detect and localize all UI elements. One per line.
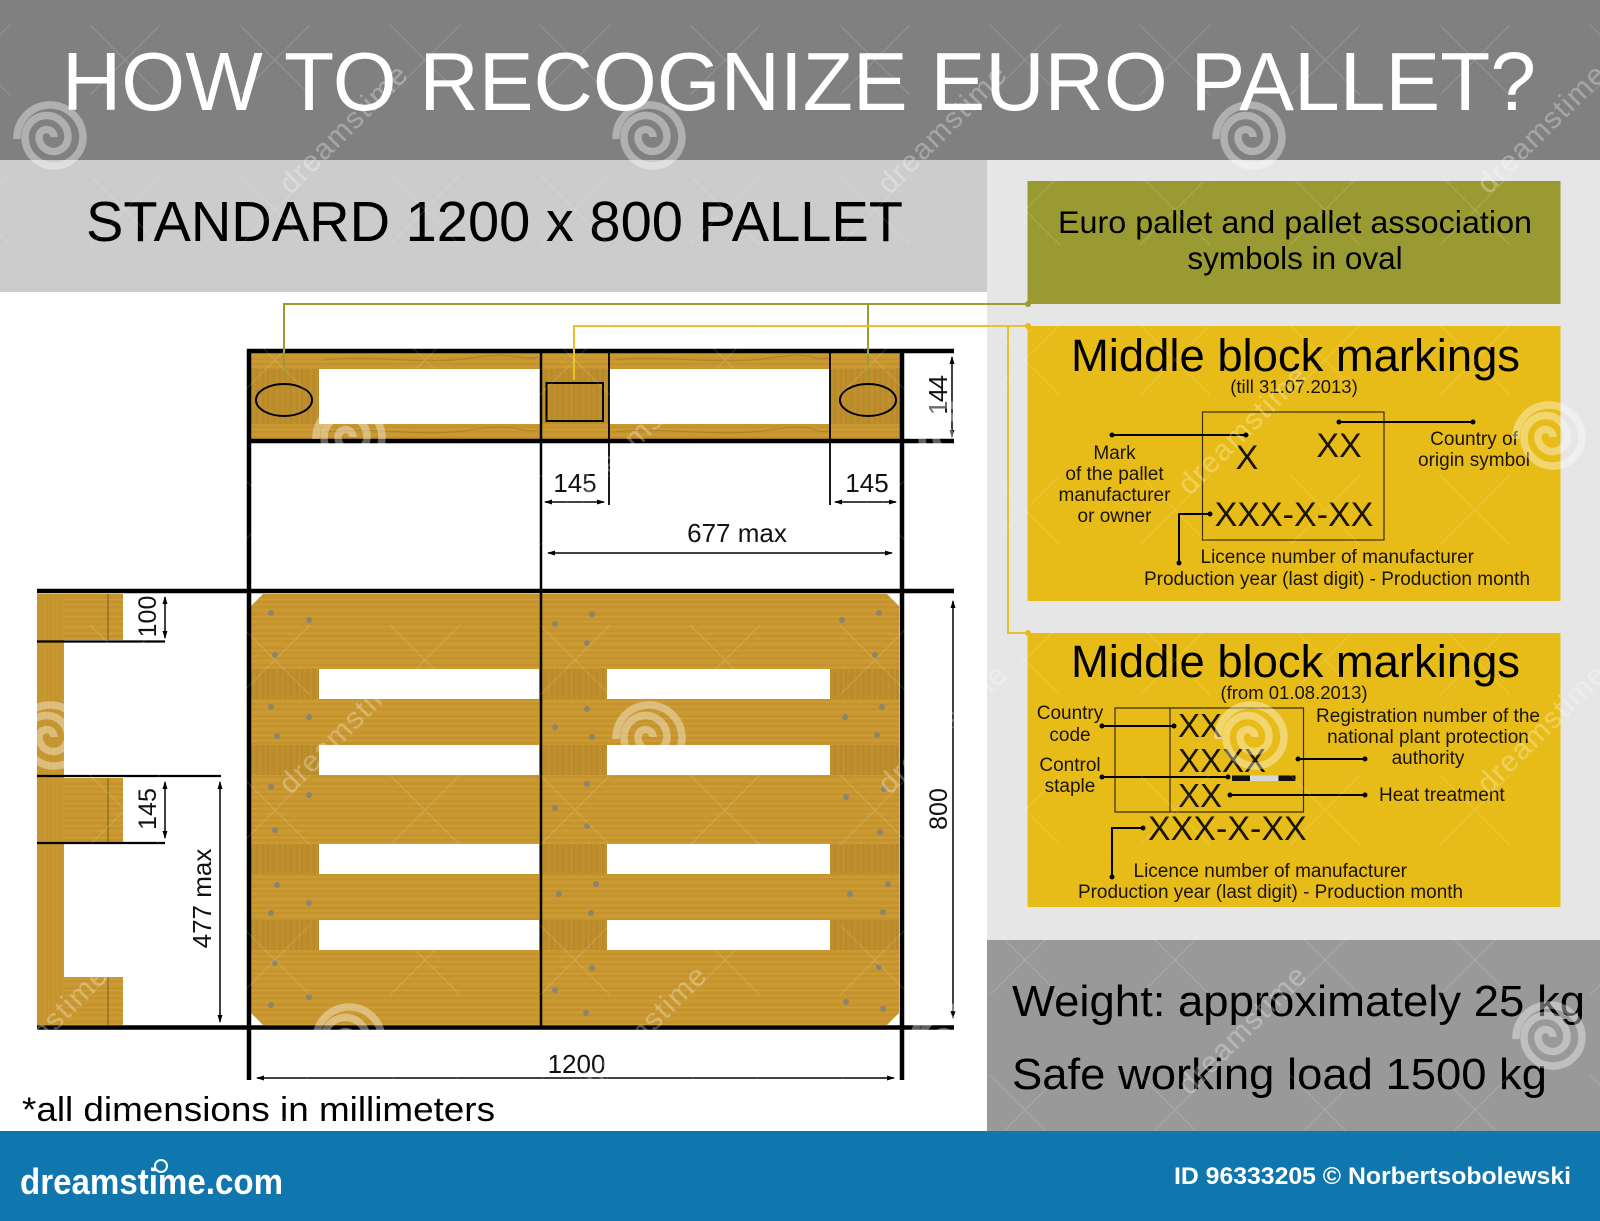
watermark wordmarks: dreamstime [571,359,713,501]
subheading band [0,160,987,292]
dimension: 477 max: 477 max [187,849,217,948]
label: production date: Production year (last digit) - Production month [1144,569,1530,590]
pallet front view [251,353,900,439]
title: HOW TO RECOGNIZE EURO PALLET? [62,35,1536,128]
connector: gold leader to marking panels [574,323,1031,636]
panel: oval symbols note [1028,181,1560,304]
dimension: 677 max: 677 max [687,518,787,548]
marking codes: XXXX [1178,742,1266,779]
heading: standard pallet: STANDARD 1200 x 800 PALLET [86,190,903,254]
marking box [1202,412,1384,540]
oval marking right [840,384,896,416]
drawing frame lines [37,349,954,1080]
wood grain curves [325,355,828,433]
dimension: 800: 800 [925,788,953,830]
label: control staple: Control [1039,755,1101,776]
dimension: 145 middle block [545,468,604,502]
watermark wordmarks: dreamstime [871,658,1013,800]
header: main title band [0,0,1600,160]
watermark wordmarks: dreamstime [272,58,414,200]
text: euro pallet symbols line one: Euro pallet and pallet association [1058,204,1532,240]
watermark spirals [17,105,1582,1068]
watermark wordmarks: dreamstime [272,658,414,800]
label: country of origin: origin symbol [1418,450,1530,471]
dimension: 1200: 1200 [548,1049,605,1079]
label: pallet manufacturer: Mark [1093,443,1136,464]
leader lines [1110,420,1476,566]
dimension: 144 [923,357,953,437]
label: pallet manufacturer: of the pallet [1065,464,1164,485]
date note: (till 31.07.2013) [1230,376,1358,397]
label: registration number: Registration number of the [1316,706,1540,727]
pallet top view [251,594,899,1025]
label: pallet manufacturer: or owner [1078,506,1152,527]
middle block square marking [546,383,603,421]
dimension: 145 end block: 145 [845,468,889,498]
footer logo: dreamstime.com [20,1161,283,1202]
watermark wordmarks: dreamstime [1171,959,1313,1101]
front view blocks [251,369,900,424]
label: registration number: authority [1392,748,1465,769]
watermark wordmarks: dreamstime [871,58,1013,200]
panel: weight and load [987,940,1600,1131]
label: heat treatment: Heat treatment [1379,785,1505,806]
label: registration number: national plant protection [1327,727,1529,748]
watermark wordmarks: dreamstime [571,959,713,1101]
connector: olive leader to symbols panel [284,301,1031,380]
marking codes: XXX-X-XX [1148,810,1307,848]
footnote: *all dimensions in millimeters [22,1091,495,1129]
marking codes: XX [1316,427,1362,465]
leader lines [1100,724,1368,880]
label: licence number: Licence number of manufacturer [1200,547,1475,568]
footer band [0,1131,1600,1221]
footer credit: ID 96333205 © Norbertsobolewski [1174,1163,1571,1190]
panel title: Middle block markings [1071,636,1520,687]
date note: (from 01.08.2013) [1220,682,1368,703]
pallet side view [37,594,123,1025]
text: euro pallet symbols line two: symbols in oval [1187,240,1403,276]
text: safe working load: Safe working load 1500 kg [1012,1050,1547,1099]
dimension: 145 middle block: 145 [553,468,597,498]
marking codes: XX [1178,777,1222,814]
marking codes [1148,707,1307,848]
panel: right side background [987,160,1600,940]
front view openings [319,369,830,424]
label: control staple: staple [1045,776,1095,797]
marking codes: XX [1178,707,1222,744]
deck gaps [319,669,830,950]
panel title: Middle block markings [1071,330,1520,381]
label: pallet manufacturer: manufacturer [1059,485,1171,506]
nails [268,610,891,1016]
dimension: 145 side [134,782,165,838]
label: country of origin: Country of [1430,429,1519,450]
label: licence number: Licence number of manufacturer [1134,861,1408,882]
marking codes: XXX-X-XX [1215,496,1373,534]
marking codes: X [1236,439,1258,477]
label: country code: Country [1037,703,1104,724]
text: weight: Weight: approximately 25 kg [1012,977,1585,1026]
dimension: 100: 100 [134,596,162,637]
label: country code: code [1049,725,1091,746]
watermark wordmarks: dreamstime [1171,359,1313,501]
panel: middle block markings from 2013 [1028,633,1560,907]
marking codes [1215,427,1373,534]
control staple [1232,776,1296,781]
darker bearer blocks [251,669,899,950]
oval marking left [256,384,312,416]
panel: middle block markings till 2013 [1028,326,1560,601]
label: production date: Production year (last digit) - Production month [1078,882,1463,903]
marking box [1115,708,1304,812]
dimension: 144: 144 [923,375,953,415]
dimension: 145 end block [835,468,896,502]
dimension: 145 side: 145 [134,788,162,830]
